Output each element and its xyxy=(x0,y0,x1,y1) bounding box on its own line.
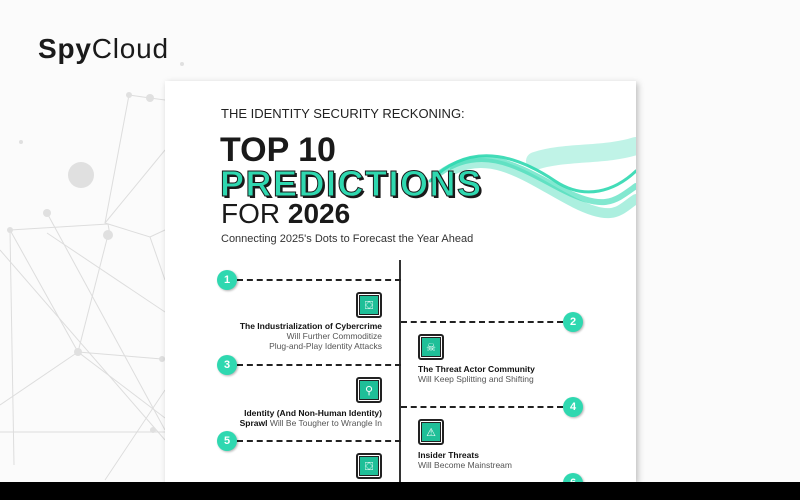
item 2 xyxy=(401,312,585,384)
item 2: Will Keep Splitting and Shifting xyxy=(418,374,534,384)
item 3 xyxy=(216,355,401,428)
item 4: 4 xyxy=(570,401,576,413)
heading: kicker: THE IDENTITY SECURITY RECKONING: xyxy=(221,106,465,121)
item 3: Sprawl Will Be Tougher to Wrangle In xyxy=(240,418,382,428)
item 4: Insider Threats xyxy=(418,450,479,460)
wave graphic xyxy=(428,137,636,218)
item 3: 3 xyxy=(224,359,230,371)
item 2: ☠ xyxy=(426,342,436,354)
item 1: Will Further Commoditize xyxy=(287,331,382,341)
item 3: ⚲ xyxy=(365,385,373,397)
item 1: ⛋ xyxy=(365,300,373,312)
item 1 xyxy=(216,270,401,351)
heading: FOR 2026: FOR 2026 xyxy=(221,198,350,229)
item 4: ⚠ xyxy=(426,427,436,439)
heading: PREDICTIONS: PREDICTIONS xyxy=(220,163,483,204)
item 5: ⛋ xyxy=(365,461,373,473)
item 6 xyxy=(563,473,583,493)
item 3: Identity (And Non-Human Identity) xyxy=(244,408,382,418)
item 1: The Industrialization of Cybercrime xyxy=(240,321,382,331)
item 1: 1 xyxy=(224,274,230,286)
item 2: The Threat Actor Community xyxy=(418,364,535,374)
heading: TOP 10: TOP 10 xyxy=(220,131,336,169)
item 2: 2 xyxy=(570,316,576,328)
panel: infographic card xyxy=(165,81,636,482)
item 5 xyxy=(216,431,401,479)
timeline axis xyxy=(399,260,401,490)
bottom bar xyxy=(0,482,800,500)
item 5: 5 xyxy=(224,435,230,447)
item 1: Plug-and-Play Identity Attacks xyxy=(269,341,382,351)
item 4 xyxy=(401,397,585,470)
item 4: Will Become Mainstream xyxy=(418,460,512,470)
subtitle: Connecting 2025's Dots to Forecast the Year Ahead xyxy=(221,233,473,245)
logo: SpyCloud: SpyCloud xyxy=(38,33,169,64)
